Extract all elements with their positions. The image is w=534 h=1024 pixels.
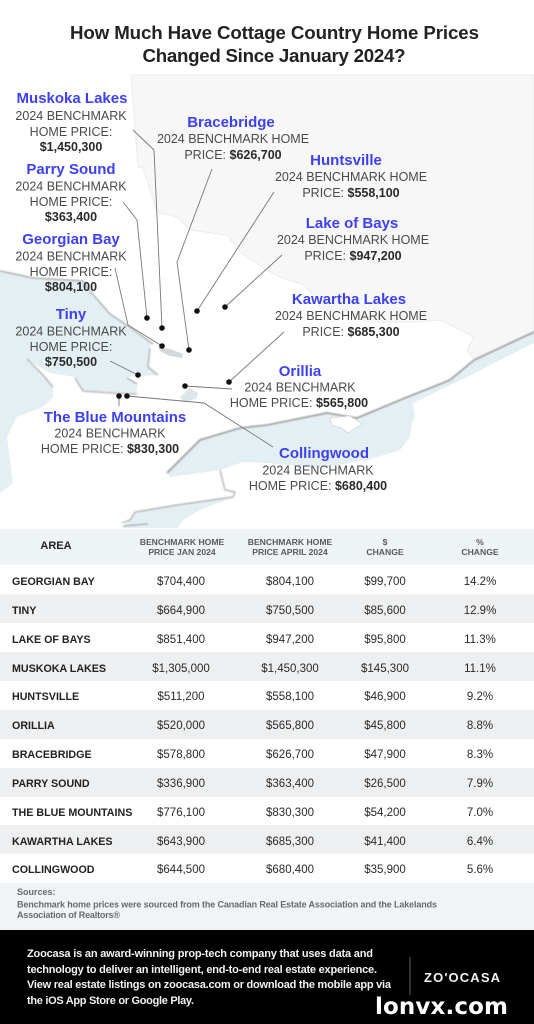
row: Tiny: $750,500 [266,605,314,617]
row: Kawartha Lakes: $685,300 [266,836,314,848]
label: Kawartha Lakes: Kawartha Lakes [292,291,406,308]
sources: Sources: [17,887,56,897]
watermark: lonvx.com [375,994,508,1020]
row: Parry Sound: PARRY SOUND [12,778,90,790]
row: Lake of Bays: $947,200 [266,634,314,646]
table header: PRICE JAN 2024 [148,547,216,557]
row: Orillia: $45,800 [364,720,406,732]
label: Parry Sound: Parry Sound [26,161,116,178]
map: Lake Ontario [167,332,534,477]
row: Muskoka Lakes [12,663,496,675]
row: Lake of Bays [12,634,496,646]
row: Parry Sound: 7.9% [467,778,493,790]
row: Muskoka Lakes: $1,305,000 [152,663,210,675]
label: Bracebridge: PRICE: $626,700 [184,148,282,162]
sources: Association of Realtors® [17,910,120,920]
row: Muskoka Lakes: $145,300 [361,663,409,675]
row: Tiny: TINY [12,605,36,617]
label: Orillia [230,363,368,410]
row: Muskoka Lakes: MUSKOKA LAKES [12,663,106,675]
label: Georgian Bay: 2024 BENCHMARK [15,250,127,264]
label: Tiny: HOME PRICE: [30,340,112,354]
label: Georgian Bay: HOME PRICE: [30,265,112,279]
label: Kawartha Lakes: PRICE: $685,300 [302,325,400,339]
table header: BENCHMARK HOME [248,537,333,547]
label: Parry Sound [15,161,127,224]
row: Muskoka Lakes: $1,450,300 [261,663,319,675]
table header: CHANGE [366,547,404,557]
row: The Blue Mountains: 7.0% [467,807,493,819]
label: Collingwood: Collingwood [279,445,369,462]
title: Changed Since January 2024? [142,45,406,66]
label: Huntsville: 2024 BENCHMARK HOME [275,170,427,184]
row: Georgian Bay: $704,400 [157,576,205,588]
row: Parry Sound: $363,400 [266,778,314,790]
label: Parry Sound: HOME PRICE: [30,195,112,209]
row: Parry Sound [12,778,493,790]
location dots [116,304,232,399]
table header [0,529,534,565]
row: Bracebridge: BRACEBRIDGE [12,749,92,761]
row: Collingwood [12,864,493,876]
row: Huntsville: $46,900 [364,691,406,703]
label: Muskoka Lakes: $1,450,300 [40,140,102,154]
footer text: technology to deliver an intelligent, end-to-end real estate experience. [27,964,377,976]
label: Orillia: Orillia [279,363,322,380]
row: Georgian Bay: $99,700 [364,576,406,588]
label: Huntsville: Huntsville [310,152,382,169]
label: Lake of Bays: Lake of Bays [306,215,398,232]
row: Kawartha Lakes: 6.4% [467,836,493,848]
label: Tiny [15,306,127,369]
map: shoreline shadows [0,271,534,526]
row: Huntsville: $511,200 [157,691,205,703]
row: The Blue Mountains: THE BLUE MOUNTAINS [12,807,132,819]
row: Collingwood: $680,400 [266,864,314,876]
label: Bracebridge [157,114,309,162]
footer text [27,948,392,1007]
row: Orillia: 8.8% [467,720,493,732]
row: Collingwood: COLLINGWOOD [12,864,95,876]
label: The Blue Mountains: The Blue Mountains [44,409,186,426]
label: Orillia: 2024 BENCHMARK [244,380,356,394]
row: Bracebridge: $578,800 [157,749,205,761]
table [0,529,534,876]
table header: PRICE APRIL 2024 [252,547,328,557]
label: Orillia: HOME PRICE: $565,800 [230,396,368,410]
row: Orillia: $520,000 [157,720,205,732]
label: Parry Sound: 2024 BENCHMARK [15,180,127,194]
row: Lake of Bays: LAKE OF BAYS [12,634,91,646]
label: The Blue Mountains: 2024 BENCHMARK [54,426,166,440]
row: Bracebridge [12,749,493,761]
label: Parry Sound: $363,400 [45,210,97,224]
row: Collingwood: $35,900 [364,864,406,876]
label: Lake of Bays: PRICE: $947,200 [304,249,402,263]
row: Georgian Bay: GEORGIAN BAY [12,576,95,588]
label: Kawartha Lakes [275,291,427,339]
row: The Blue Mountains: $776,100 [157,807,205,819]
label: Muskoka Lakes: Muskoka Lakes [17,90,127,107]
label: Lake of Bays: 2024 BENCHMARK HOME [277,233,429,247]
label: Huntsville: PRICE: $558,100 [302,186,400,200]
label: Huntsville [275,152,427,200]
logo: ZO'OCASA [424,970,501,985]
row: Lake of Bays: $95,800 [364,634,406,646]
row: The Blue Mountains: $54,200 [364,807,406,819]
row: Huntsville: $558,100 [266,691,314,703]
table header: BENCHMARK HOME [140,537,225,547]
footer text: the iOS App Store or Google Play. [27,995,194,1007]
row: Georgian Bay: $804,100 [266,576,314,588]
row: Bracebridge: $47,900 [364,749,406,761]
row: Parry Sound: $336,900 [157,778,205,790]
row: Parry Sound: $26,500 [364,778,406,790]
row: Collingwood: $644,500 [157,864,205,876]
row: The Blue Mountains [12,807,493,819]
map: Georgian Bay and Lake Huron [0,270,158,493]
footer divider [410,957,411,995]
label: The Blue Mountains: HOME PRICE: $830,300 [41,442,179,456]
title [70,22,479,66]
label: The Blue Mountains [41,409,186,456]
row: Georgian Bay: 14.2% [464,576,496,588]
label: Georgian Bay: $804,100 [45,280,97,294]
label: Tiny: $750,500 [45,355,97,369]
title: How Much Have Cottage Country Home Prices [70,22,479,43]
row: Huntsville: 9.2% [467,691,493,703]
table header: AREA [40,540,72,552]
row: Bracebridge: $626,700 [266,749,314,761]
label: Muskoka Lakes: HOME PRICE: [30,125,112,139]
label: Collingwood: 2024 BENCHMARK [262,464,374,478]
row: Huntsville [12,691,493,703]
sources [0,883,534,930]
label: Lake of Bays [277,215,429,263]
footer [0,930,534,1024]
map [0,75,534,528]
row: Orillia: ORILLIA [12,720,55,732]
row: Collingwood: 5.6% [467,864,493,876]
row: Tiny: $664,900 [157,605,205,617]
row: Georgian Bay [12,576,496,588]
row: Lake of Bays: 11.3% [464,634,496,646]
row: Kawartha Lakes: KAWARTHA LAKES [12,836,113,848]
leader lines [110,130,284,447]
row: Kawartha Lakes [12,836,493,848]
label: Tiny: Tiny [56,306,87,323]
map: Lake Erie [122,497,233,528]
map: Lake Simcoe [180,388,198,402]
table row stripes [0,594,534,854]
row: The Blue Mountains: $830,300 [266,807,314,819]
row: Tiny: 12.9% [464,605,496,617]
table header: % [476,537,484,547]
row: Muskoka Lakes: 11.1% [464,663,496,675]
row: Kawartha Lakes: $41,400 [364,836,406,848]
row: Orillia: $565,800 [266,720,314,732]
map: northern region [131,75,534,360]
label: Kawartha Lakes: 2024 BENCHMARK HOME [275,309,427,323]
label: Georgian Bay: Georgian Bay [22,231,120,248]
row: Orillia [12,720,493,732]
footer text: Zoocasa is an award-winning prop-tech company that uses data and [27,948,373,960]
row: Tiny [12,605,496,617]
row: Bracebridge: 8.3% [467,749,493,761]
label: Muskoka Lakes: 2024 BENCHMARK [15,109,127,123]
label: Muskoka Lakes [15,90,127,154]
map: island [330,416,362,433]
row: Lake of Bays: $851,400 [157,634,205,646]
row: Tiny: $85,600 [364,605,406,617]
label: Collingwood: HOME PRICE: $680,400 [249,479,387,493]
label: Tiny: 2024 BENCHMARK [15,324,127,338]
table header: CHANGE [461,547,499,557]
label: Bracebridge: 2024 BENCHMARK HOME [157,132,309,146]
row: Huntsville: HUNTSVILLE [12,691,79,703]
label: Collingwood [249,445,387,493]
table header: $ [383,537,388,547]
map: Georgian Bay inlets [158,347,183,358]
label: Bracebridge: Bracebridge [187,114,275,131]
row: Kawartha Lakes: $643,900 [157,836,205,848]
sources: Benchmark home prices were sourced from the Canadian Real Estate Association and the Lakelands [17,900,437,910]
label: Georgian Bay [15,231,127,294]
footer text: View real estate listings on zoocasa.com or download the mobile app via [27,979,392,991]
